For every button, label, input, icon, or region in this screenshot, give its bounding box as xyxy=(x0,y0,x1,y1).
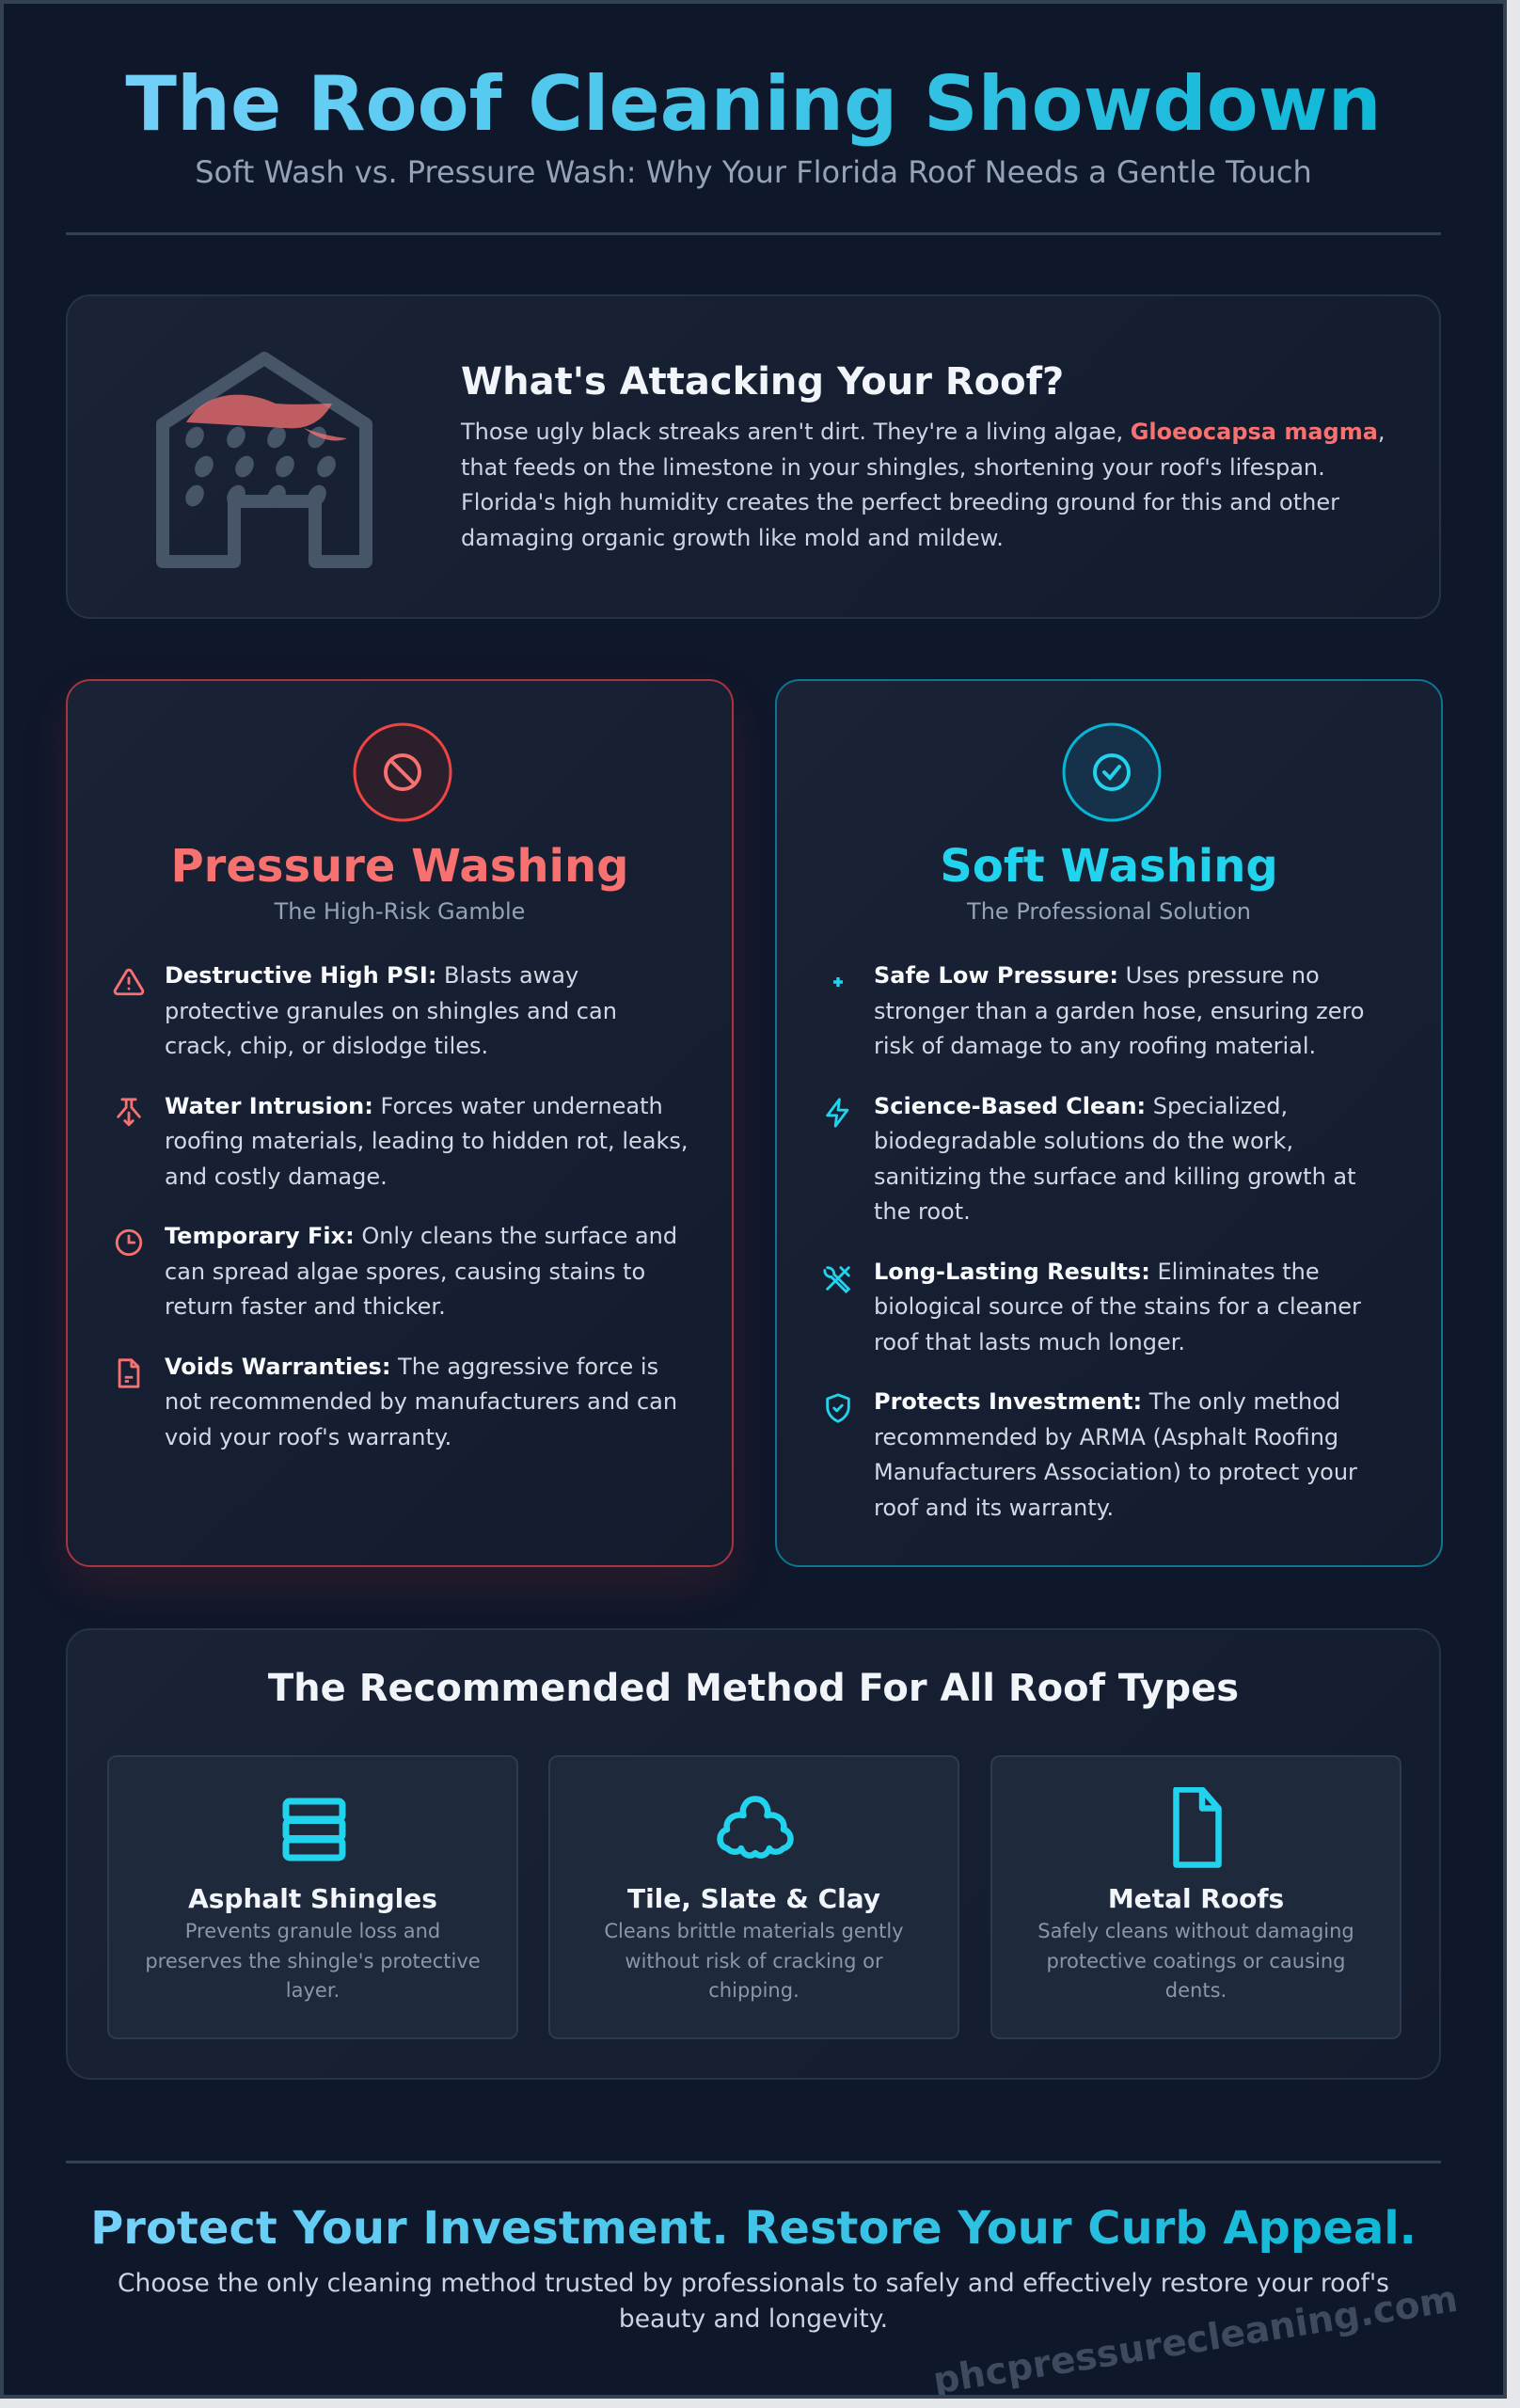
item: long-lasting results: Long-Lasting Results: Eliminates the biological source of the stains for a cleaner roof that lasts much longer. xyxy=(874,1259,1361,1354)
heading: pressure washing: Pressure Washing xyxy=(170,840,628,893)
card: asphalt shingles xyxy=(107,1755,518,2039)
icon: prohibited xyxy=(354,722,451,822)
list: soft washing benefits xyxy=(823,962,1364,1520)
list: pressure washing risks xyxy=(113,962,689,1450)
item: voids warranties: Voids Warranties: The aggressive force is not recommended by manufacturers and can void your roof's warranty. xyxy=(165,1353,677,1450)
cta heading: Protect Your Investment. Restore Your Curb Appeal. xyxy=(90,2202,1417,2255)
subheading: The High-Risk Gamble xyxy=(275,898,525,925)
text block: algae description: Those ugly black streaks aren't dirt. They're a living algae, Gloeocapsa magma, that feeds on the limestone in your shingles, shortening your roof's lifespan. Florida's high humidity creates the perfect breeding ground for this and other damaging organic growth like mold and mildew. xyxy=(461,419,1385,551)
heading: what's attacking: What's Attacking Your Roof? xyxy=(461,360,1064,404)
card: asphalt shingles: Prevents granule loss and preserves the shingle's protective layer. xyxy=(145,1920,481,2002)
item: safe low pressure: Safe Low Pressure: Uses pressure no stronger than a garden hose, ensuring zero risk of damage to any roofing material. xyxy=(874,962,1364,1059)
card: tile slate clay: Cleans brittle materials gently without risk of cracking or chipping. xyxy=(604,1920,904,2002)
panel: roof types xyxy=(66,1628,1441,2080)
item: protects investment: Protects Investment: The only method recommended by ARMA (Asphalt Roofing Manufacturers Association) to protect your roof and its warranty. xyxy=(874,1388,1357,1520)
card: metal roofs: Metal Roofs xyxy=(1108,1883,1284,1914)
subheading: The Professional Solution xyxy=(967,898,1251,925)
card: tile slate clay xyxy=(548,1755,959,2039)
icon: cloud xyxy=(717,1796,794,1859)
item: water intrusion: Water Intrusion: Forces water underneath roofing materials, leading to hidden rot, leaks, and costly damage. xyxy=(165,1093,689,1189)
card: metal roofs: Safely cleans without damaging protective coatings or causing dents. xyxy=(1037,1920,1354,2002)
heading: soft washing: Soft Washing xyxy=(940,840,1278,893)
item: science-based clean: Science-Based Clean: Specialized, biodegradable solutions do the work, sanitizing the surface and killing growth at the root. xyxy=(874,1093,1356,1225)
icon: layers xyxy=(282,1798,346,1861)
card: asphalt shingles: Asphalt Shingles xyxy=(188,1883,437,1914)
cta text: Choose the only cleaning method trusted by professionals to safely and effectively restore your roof's beauty and longevity. xyxy=(118,2269,1389,2333)
item: temporary fix: Temporary Fix: Only cleans the surface and can spread algae spores, causing stains to return faster and thicker. xyxy=(165,1223,677,1320)
subtitle: Soft Wash vs. Pressure Wash: Why Your Florida Roof Needs a Gentle Touch xyxy=(195,154,1312,190)
card: metal roofs xyxy=(990,1755,1401,2039)
title: The Roof Cleaning Showdown xyxy=(125,60,1382,148)
card: tile slate clay: Tile, Slate & Clay xyxy=(627,1883,880,1914)
icon: check circle xyxy=(1063,722,1161,822)
icon: house with algae xyxy=(156,352,372,568)
heading: roof types: The Recommended Method For All Roof Types xyxy=(268,1667,1239,1710)
panel: what's attacking xyxy=(66,294,1441,619)
item: destructive high psi: Destructive High PSI: Blasts away protective granules on shingles and can crack, chip, or dislodge tiles. xyxy=(165,962,617,1059)
panel: pressure washing xyxy=(66,679,734,1567)
panel: soft washing xyxy=(775,679,1443,1567)
icon: file xyxy=(1173,1787,1222,1868)
